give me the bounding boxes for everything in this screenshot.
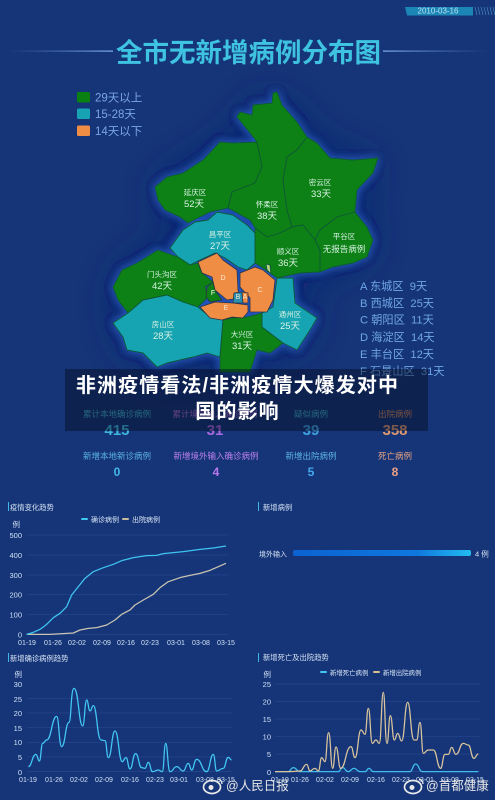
- chart: new deaths and discharged trend: 例: [264, 669, 271, 679]
- legend: [77, 92, 142, 138]
- chart: trend of cases: 02-09: [93, 640, 111, 647]
- map labels: 大兴区: [231, 329, 254, 339]
- stat row: new: 死亡病例: [378, 451, 412, 461]
- chart: trend of cases: 例: [12, 519, 20, 529]
- district list: F 石景山区 31天: [360, 365, 445, 378]
- headline: 非洲疫情看法/非洲疫情大爆发对中: [76, 373, 399, 397]
- chart: new confirmed trend: 25: [14, 695, 22, 704]
- chart: new deaths and discharged trend: 03-15: [466, 777, 484, 784]
- chart: new deaths and discharged trend: 01-19: [271, 777, 289, 784]
- dark title band: [65, 369, 428, 431]
- chart: new confirmed trend: 02-23: [146, 777, 164, 784]
- map labels: 昌平区: [209, 230, 232, 239]
- chart: trend of cases: 400: [9, 551, 22, 560]
- chart: trend of cases: 03-15: [217, 640, 235, 647]
- chart: new cases bar: 新增病例: [263, 503, 292, 512]
- map labels: D: [220, 275, 226, 282]
- chart: new confirmed trend: 新增确诊病例趋势: [10, 654, 69, 663]
- chart: new cases bar: 4 例: [475, 548, 489, 558]
- chart: trend of cases: 300: [9, 571, 22, 580]
- chart legend: [320, 668, 421, 677]
- map labels: 31天: [232, 341, 253, 352]
- chart: new confirmed trend: 20: [14, 709, 22, 718]
- stat row: cumulative: 39: [303, 422, 319, 439]
- chart: new confirmed trend: 例: [14, 669, 22, 679]
- chart: trend of cases: 疫情变化趋势: [10, 503, 54, 512]
- stat row: new: 新增境外输入确诊病例: [173, 451, 259, 461]
- legend: 15-28天: [95, 109, 136, 121]
- map labels: E: [224, 305, 229, 312]
- map labels: 平谷区: [333, 232, 356, 241]
- map labels: 顺义区: [277, 247, 300, 256]
- chart: new deaths and discharged trend: 02-23: [392, 777, 410, 784]
- map labels: 28天: [153, 331, 174, 342]
- watermark: Capital Health: @首都健康: [426, 778, 489, 793]
- date badge: [405, 7, 495, 16]
- chart: new deaths and discharged trend: 25: [263, 680, 271, 689]
- map labels: 36天: [278, 258, 299, 269]
- chart: new deaths and discharged trend: 15: [263, 715, 271, 724]
- map labels: C: [257, 287, 263, 294]
- chart: new deaths and discharged trend: 10: [263, 732, 271, 742]
- chart: new confirmed trend: 01-19: [19, 777, 37, 784]
- chart: new deaths and discharged trend: 01-26: [291, 777, 309, 784]
- watermark: People's Daily: [204, 778, 289, 794]
- chart: trend of cases: 03-08: [192, 640, 210, 647]
- legend: 29天以上: [95, 92, 142, 104]
- district list: C 朝阳区 11天: [360, 314, 434, 326]
- map labels: 33天: [311, 189, 332, 200]
- district list: D 海淀区 14天: [360, 330, 435, 344]
- chart: trend of cases: 02-02: [68, 640, 86, 647]
- chart: trend of cases: 100: [9, 610, 22, 620]
- chart: new deaths and discharged trend: 0: [267, 768, 271, 777]
- chart: new confirmed trend: 03-15: [217, 777, 235, 784]
- district list: B 西城区 25天: [360, 297, 434, 310]
- chart: new confirmed trend: [8, 653, 235, 784]
- stat row: cumulative: 415: [104, 422, 130, 439]
- map labels: 38天: [257, 211, 278, 222]
- stat row: cumulative: 累计境外输入确诊病例: [172, 409, 258, 419]
- chart: new confirmed trend: 15: [14, 724, 22, 733]
- chart: trend of cases: [8, 502, 235, 647]
- stat row: new: [83, 451, 412, 479]
- headline: [76, 373, 399, 423]
- map labels: 42天: [152, 281, 173, 292]
- map labels: 怀柔区: [256, 199, 279, 209]
- stat row: new: 4: [213, 465, 220, 479]
- chart legend: 出院病例: [132, 515, 160, 524]
- district list: [360, 280, 445, 378]
- chart: new confirmed trend: 02-16: [121, 777, 139, 784]
- map labels: 通州区: [279, 309, 302, 319]
- map of Beijing districts: [113, 92, 378, 372]
- chart legend: 新增出院病例: [383, 668, 421, 677]
- chart legend: [81, 515, 160, 524]
- chart: new deaths and discharged trend: 5: [267, 750, 271, 759]
- chart: new confirmed trend: 0: [18, 768, 22, 777]
- watermark: Capital Health: [404, 778, 489, 794]
- stat row: new: 5: [308, 465, 315, 479]
- chart: new deaths and discharged trend: 02-16: [367, 777, 385, 784]
- chart: trend of cases: 500: [9, 531, 22, 540]
- map labels: 27天: [210, 241, 231, 252]
- map labels: 无报告病例: [323, 244, 365, 254]
- map labels: 延庆区: [184, 187, 207, 197]
- map labels: 密云区: [309, 177, 332, 187]
- district list: A 东城区 9天: [360, 280, 427, 293]
- chart: new deaths and discharged trend: 20: [263, 698, 271, 706]
- chart: trend of cases: 01-26: [44, 640, 62, 647]
- stat row: cumulative: 疑似病例: [294, 409, 328, 419]
- chart: new deaths and discharged trend: 02-09: [341, 777, 359, 784]
- map labels: 52天: [184, 199, 205, 210]
- chart: new deaths and discharged trend: 03-08: [441, 777, 459, 784]
- stat row: cumulative: 358: [382, 422, 408, 439]
- chart: new cases bar: 境外输入: [259, 550, 287, 558]
- stat row: cumulative: 累计本地确诊病例: [83, 409, 151, 419]
- title: 全市无新增病例分布图: [116, 38, 381, 68]
- watermark: People's Daily: @人民日报: [226, 778, 289, 793]
- chart: new confirmed trend: 03-08: [196, 777, 214, 784]
- district list: E 丰台区 12天: [360, 347, 434, 361]
- chart: new deaths and discharged trend: [258, 653, 484, 784]
- chart: new deaths and discharged trend: 03-01: [416, 777, 434, 784]
- stat row: cumulative: 31: [207, 422, 223, 439]
- chart: new deaths and discharged trend: 新增死亡及出院趋势: [263, 653, 329, 662]
- stat row: new: 0: [114, 465, 121, 479]
- map labels: 房山区: [152, 319, 175, 329]
- chart: new cases bar: [258, 502, 489, 558]
- legend: 14天以下: [95, 125, 142, 138]
- date badge: 2010-03-16: [418, 7, 459, 16]
- chart: trend of cases: 01-19: [18, 640, 36, 647]
- chart: new confirmed trend: 30: [14, 680, 22, 689]
- chart legend: 确诊病例: [91, 515, 119, 524]
- headline: 国的影响: [195, 400, 280, 423]
- chart: new confirmed trend: 02-09: [95, 777, 113, 784]
- map labels: 门头沟区: [147, 269, 177, 279]
- stat row: new: 新增本地新诊病例: [83, 451, 151, 461]
- stat row: cumulative: 出院病例: [378, 409, 412, 419]
- map labels: B: [236, 294, 241, 301]
- map labels: [147, 177, 365, 352]
- map labels: 25天: [280, 321, 301, 332]
- chart: new confirmed trend: 10: [14, 738, 22, 747]
- chart: trend of cases: 0: [18, 630, 22, 640]
- stat row: new: 新增出院病例: [285, 451, 337, 461]
- chart: new confirmed trend: 02-02: [70, 777, 88, 784]
- map labels: A: [243, 294, 248, 301]
- chart: new confirmed trend: 01-26: [45, 777, 63, 784]
- chart: trend of cases: 02-23: [141, 640, 159, 647]
- stat row: cumulative: [83, 409, 412, 439]
- stat row: new: 8: [392, 465, 399, 479]
- chart: trend of cases: 03-01: [167, 640, 185, 647]
- chart: new confirmed trend: 5: [18, 753, 22, 762]
- chart legend: 新增死亡病例: [330, 668, 368, 677]
- chart: trend of cases: 02-16: [117, 640, 135, 647]
- map labels: F: [211, 290, 215, 297]
- statistics: [83, 409, 412, 479]
- chart: new deaths and discharged trend: 02-02: [316, 777, 334, 784]
- chart: new confirmed trend: 03-01: [170, 777, 188, 784]
- chart: trend of cases: 200: [9, 590, 22, 600]
